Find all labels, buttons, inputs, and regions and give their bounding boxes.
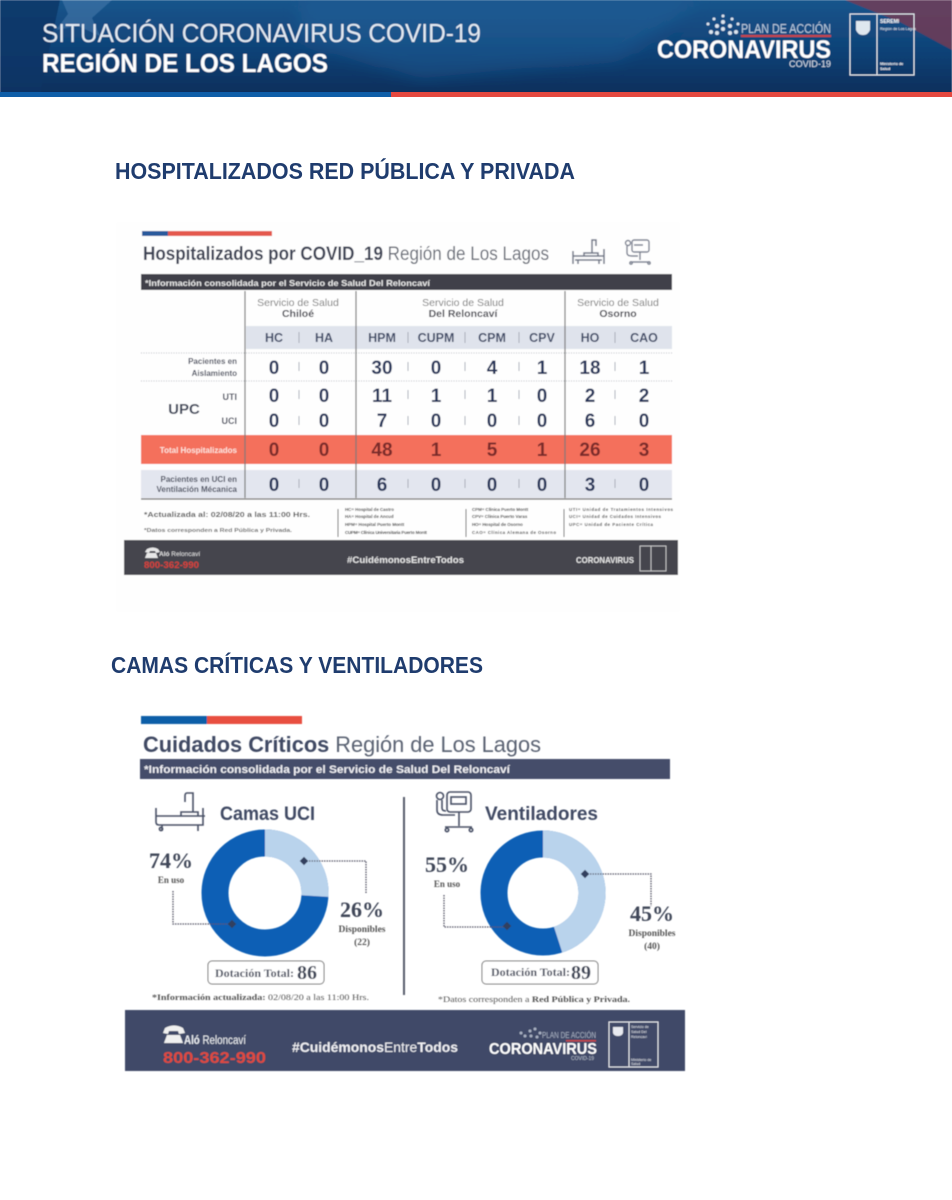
header title [42, 18, 481, 78]
table values: 2 [639, 386, 649, 407]
table values: 0 [269, 358, 279, 379]
donut chart: camas uci [215, 843, 315, 943]
column codes: CPV [529, 331, 556, 345]
header stripe [0, 92, 952, 97]
info strip: *Información consolidada por el Servicio de Salud Del Reloncaví [145, 278, 431, 288]
plan de acción coronavirus logo: PLAN DE ACCIÓN [542, 1030, 596, 1040]
abbreviations legend: UPC= Unidad de Paciente Crítica [569, 522, 654, 527]
table values: 0 [269, 386, 279, 407]
row labels [157, 357, 238, 494]
abbreviations legend: CPV= Clínica Puerto Varas [472, 514, 528, 519]
panel: hospitalizados table [116, 222, 680, 612]
service headers: Servicio de Salud [422, 297, 504, 309]
callout: 55% en uso: 55% [425, 852, 469, 877]
table values: 0 [269, 440, 279, 461]
callout: 55% en uso [425, 852, 511, 930]
seremi ministry of health logo: Ministerio de [880, 62, 903, 66]
column codes: HO [581, 331, 600, 345]
column codes: HC [265, 331, 283, 345]
table footer band: 800-362-990 [144, 560, 199, 571]
service headers: Del Reloncaví [429, 308, 499, 320]
table values: 0 [537, 386, 547, 407]
row labels: UTI [222, 392, 237, 402]
ministry logo [609, 1022, 658, 1067]
update notes [144, 510, 310, 534]
aló reloncaví hotline: 800-362-990 [163, 1050, 266, 1067]
callout: 26% disponibles: Disponibles [338, 925, 386, 935]
abbreviations legend: HO= Hospital de Osorno [472, 522, 523, 527]
table values: 0 [487, 475, 497, 496]
table values: 4 [487, 358, 498, 379]
column codes: CUPM [418, 331, 454, 345]
callout: 55% en uso: En uso [434, 879, 461, 889]
callout: 74% en uso: 74% [149, 848, 193, 873]
table values: 30 [371, 358, 393, 379]
table values: 7 [377, 411, 387, 432]
abbreviations legend: CPM= Clínica Puerto Montt [472, 507, 529, 512]
column codes: CAO [630, 331, 658, 345]
table values: 1 [537, 440, 548, 461]
icon: telephone [163, 1026, 185, 1043]
callout: 45% disponibles: Disponibles [628, 929, 676, 939]
header title: SITUACIÓN CORONAVIRUS COVID-19 [42, 18, 481, 48]
service headers: Servicio de Salud [577, 297, 659, 309]
row labels: Aislamiento [192, 369, 237, 378]
callout: 45% disponibles [581, 870, 676, 952]
divider [403, 797, 405, 995]
ministry logo: Reloncaví [631, 1035, 647, 1039]
dotación total 86 [208, 961, 324, 984]
column codes: HA [315, 331, 333, 345]
dotación total 89: 89 [571, 962, 591, 984]
abbreviations legend: UTI= Unidad de Tratamientos Intensivos [569, 507, 674, 512]
seremi ministry of health logo: SEREMI [880, 19, 900, 25]
abbreviations legend: HC= Hospital de Castro [345, 507, 394, 512]
update notes: *Datos corresponden a Red Pública y Privada. [144, 528, 293, 534]
table values: 0 [639, 475, 649, 496]
info strip: *Información consolidada por el Servicio de Salud Del Reloncaví [144, 764, 511, 776]
table values: 0 [269, 475, 279, 496]
plan de acción coronavirus logo: CORONAVIRUS [657, 36, 831, 64]
heading: camas uci: Camas UCI [220, 804, 315, 825]
abbreviations legend: HPM= Hospital Puerto Montt [345, 522, 405, 527]
heading: camas críticas: CAMAS CRÍTICAS Y VENTILADORES [111, 651, 483, 678]
table values: 0 [319, 411, 329, 432]
table values: 0 [431, 411, 441, 432]
table footer band: Aló Reloncaví [159, 551, 200, 558]
table values: 0 [269, 411, 279, 432]
note: actualizada: *Información actualizada: 02/08/20 a las 11:00 Hrs. [152, 993, 369, 1002]
panel: cuidados críticos [125, 716, 685, 1071]
table footer band: #CuidémonosEntreTodos [347, 555, 464, 565]
column codes: HPM [368, 331, 396, 345]
info strip [141, 274, 672, 290]
plan de acción coronavirus logo: CORONAVIRUS [489, 1041, 597, 1058]
table values: 0 [639, 411, 649, 432]
table values [269, 358, 650, 496]
plan de acción coronavirus logo: COVID-19 [571, 1056, 594, 1062]
table values: 1 [431, 386, 442, 407]
abbreviations legend: CAO= Clínica Alemana de Osorno [472, 530, 556, 535]
accent bar [141, 716, 302, 724]
footer band [125, 1010, 685, 1071]
ministry logo: Servicio de [631, 1025, 649, 1029]
table values: 6 [377, 475, 387, 496]
table values: 3 [639, 440, 649, 461]
header title: REGIÓN DE LOS LAGOS [42, 48, 328, 78]
hashtag: #CuidémonosEntreTodos [292, 1039, 458, 1055]
icon: hospital bed [573, 240, 604, 264]
donut chart: ventiladores [494, 844, 592, 942]
heading: hospitalizados: HOSPITALIZADOS RED PÚBLICA Y PRIVADA [115, 157, 575, 184]
abbreviations legend: UCI= Unidad de Cuidados Intensivos [569, 514, 662, 519]
icon: ventilator [436, 792, 473, 832]
table values: 11 [372, 386, 392, 407]
callout: 74% en uso [149, 848, 236, 928]
table values: 2 [585, 386, 595, 407]
table values: 1 [639, 358, 650, 379]
row labels: UCI [222, 416, 237, 426]
table values: 0 [319, 440, 329, 461]
service headers: Osorno [599, 308, 637, 320]
table values: 48 [371, 440, 393, 461]
plan de acción coronavirus logo [657, 14, 831, 69]
callout: 26% disponibles: (22) [354, 937, 370, 948]
plan de acción coronavirus logo: COVID-19 [789, 59, 831, 69]
seremi ministry of health logo [850, 14, 916, 75]
ventilation row band [141, 470, 672, 498]
row labels: Total Hospitalizados [160, 446, 238, 455]
row labels: Pacientes en [188, 357, 237, 366]
table values: 3 [585, 475, 595, 496]
service headers [257, 297, 659, 320]
note: red pública y privada: *Datos corresponden a Red Pública y Privada. [438, 994, 630, 1004]
icon: hospital bed [156, 793, 205, 831]
callout: 45% disponibles: (40) [644, 941, 660, 952]
table values: 0 [487, 411, 497, 432]
table values: 18 [579, 358, 601, 379]
total row band [141, 435, 672, 464]
accent bar [142, 231, 272, 236]
table footer band [124, 540, 678, 575]
header banner [0, 0, 952, 93]
dotación total 86: 86 [297, 962, 317, 984]
table values: 5 [487, 440, 498, 461]
panel title: Cuidados Críticos Región de Los Lagos [143, 732, 541, 757]
abbreviations legend: HA= Hospital de Ancud [345, 514, 394, 519]
table values: 0 [319, 358, 329, 379]
table values: 0 [537, 411, 547, 432]
ministry logo: Salud Del [631, 1030, 647, 1034]
service headers: Servicio de Salud [257, 297, 339, 309]
table footer band: CORONAVIRUS [576, 555, 634, 565]
row labels: UPC [168, 401, 200, 418]
icon: ventilator [626, 240, 650, 264]
dotación total 89: Dotación Total: [491, 967, 570, 979]
aló reloncaví hotline [163, 1035, 266, 1067]
seremi ministry of health logo: Salud [880, 67, 891, 71]
dotación total 86: Dotación Total: [215, 968, 294, 980]
row labels: Pacientes en UCI en [161, 475, 237, 484]
heading: ventiladores: Ventiladores [485, 804, 598, 825]
row labels: Ventilación Mécanica [157, 485, 238, 494]
table values: 6 [585, 411, 595, 432]
table values: 0 [537, 475, 547, 496]
table values: 0 [319, 386, 329, 407]
plan de acción coronavirus logo: PLAN DE ACCIÓN [741, 21, 831, 36]
ministry logo: Ministerio de [631, 1058, 651, 1062]
service headers: Chiloé [282, 308, 314, 320]
abbreviations legend [338, 507, 674, 537]
abbreviations legend: CUPM= Clínica Universitaria Puerto Montt [345, 530, 428, 535]
ministry logo: Salud [631, 1062, 640, 1066]
info strip [140, 759, 670, 779]
table values: 1 [537, 358, 548, 379]
callout: 74% en uso: En uso [158, 875, 185, 885]
table values: 1 [431, 440, 442, 461]
update notes: *Actualizada al: 02/08/20 a las 11:00 Hrs. [144, 510, 310, 519]
column code band [246, 326, 672, 349]
seremi ministry of health logo: Región de Los Lagos [880, 27, 916, 31]
table values: 1 [487, 386, 498, 407]
dotación total 89 [482, 961, 598, 984]
plan de acción coronavirus logo [489, 1028, 597, 1062]
callout: 26% disponibles [300, 857, 386, 948]
table values: 0 [319, 475, 329, 496]
table values: 26 [579, 440, 601, 461]
callout: 26% disponibles: 26% [340, 897, 384, 922]
aló reloncaví hotline: Aló Reloncaví [184, 1035, 247, 1047]
table title: Hospitalizados por COVID_19 Región de Los Lagos [143, 244, 549, 265]
column codes: CPM [478, 331, 506, 345]
callout: 45% disponibles: 45% [630, 901, 674, 926]
table values: 0 [431, 358, 441, 379]
column codes [265, 331, 658, 345]
table values: 0 [431, 475, 441, 496]
